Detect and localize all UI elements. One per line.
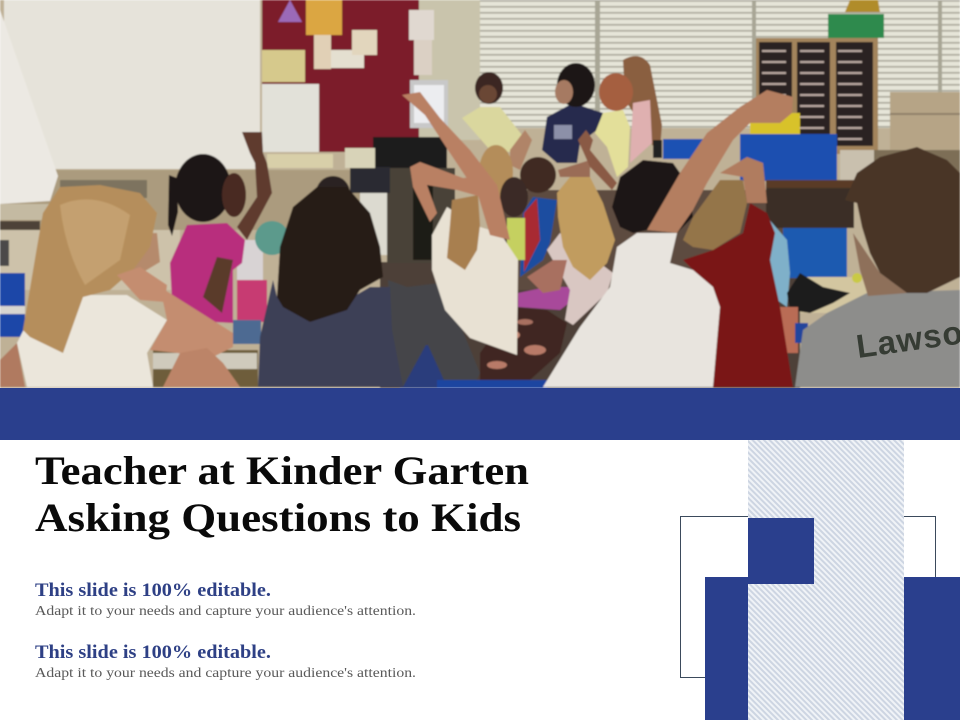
title: Teacher at Kinder Garten <box>35 448 529 493</box>
title <box>35 448 529 540</box>
text block two: Adapt it to your needs and capture your audience's attention. <box>35 666 416 681</box>
blonde girl in back row <box>518 177 615 325</box>
text block one <box>35 581 416 619</box>
whiteboard <box>4 0 260 169</box>
girl at left with blonde hair <box>0 185 240 387</box>
text block one: Adapt it to your needs and capture your audience's attention. <box>35 604 416 619</box>
right-side child in blue <box>767 217 790 307</box>
girl raising arm in white top <box>402 92 567 388</box>
desk and monitor <box>373 137 447 168</box>
red bulletin board <box>262 0 419 152</box>
decorative block graphic <box>680 440 960 720</box>
text block <box>35 448 529 681</box>
hatched column <box>748 440 904 720</box>
text block one: This slide is 100% editable. <box>35 581 271 601</box>
title: Asking Questions to Kids <box>35 495 521 540</box>
boy in grey Lawson shirt <box>795 147 960 387</box>
blue bins <box>740 134 837 181</box>
outline frame <box>680 516 936 678</box>
classroom wall <box>0 0 960 388</box>
boy in white shirt raising arm <box>543 90 793 387</box>
text block two <box>35 643 416 681</box>
text block two: This slide is 100% editable. <box>35 643 271 663</box>
girl with long dark hair <box>258 176 480 387</box>
child in red shirt <box>683 157 793 387</box>
teacher and children in front of the window <box>462 56 662 190</box>
window blinds <box>480 0 960 128</box>
shelf unit <box>756 38 878 154</box>
classroom photo <box>0 0 960 388</box>
globe <box>255 221 289 255</box>
centre blue square <box>748 518 814 584</box>
left blue block <box>705 577 748 720</box>
flip chart <box>0 10 58 204</box>
blue band <box>0 388 960 440</box>
books on the floor <box>153 350 258 387</box>
right blue block <box>904 577 960 720</box>
back row children <box>520 197 557 277</box>
shaded floor behind the children <box>380 262 800 388</box>
girl in pink <box>168 132 272 344</box>
blue bin at left <box>0 273 25 337</box>
